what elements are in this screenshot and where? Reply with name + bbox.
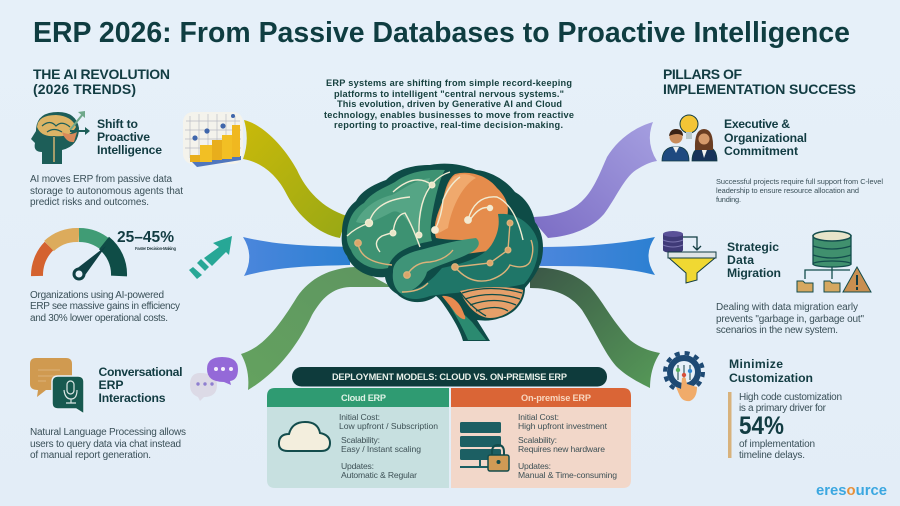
cloud ERP facts: Scalability: (341, 435, 380, 445)
subheading: strategic data migration: Data (727, 253, 754, 267)
brain: orange highlight (437, 174, 476, 234)
brain outline (342, 164, 543, 341)
on-premise ERP facts: Manual & Time-consuming (518, 470, 617, 480)
text: AI moves ERP (30, 174, 183, 208)
intro text block: ERP systems are shifting from simple record-keeping (326, 78, 572, 88)
callout: 54 percent: High code customization (739, 392, 842, 403)
ribbon: right blue (540, 237, 655, 275)
ribbon: dark green (530, 268, 660, 388)
subheading: strategic data migration (727, 240, 781, 280)
ribbon: yellow (243, 120, 347, 238)
on-premise ERP facts: High upfront investment (518, 421, 608, 431)
cloud ERP facts: Updates: (341, 461, 374, 471)
column: cloud ERP: Cloud ERP (341, 393, 386, 403)
on-premise ERP facts (518, 412, 617, 480)
text: data migration (716, 302, 864, 336)
stat: 54%: 54% (739, 412, 784, 440)
subheading: shift to proactive intelligence: Proactive (97, 130, 150, 144)
ribbon: purple (530, 122, 657, 238)
subheading: executive commitment: Organizational (724, 131, 807, 145)
text: data migration: prevents "garbage in, garbage out" (716, 314, 864, 325)
intro text block: platforms to intelligent "central nervous systems." (334, 89, 564, 99)
on-premise ERP facts: Scalability: (518, 435, 557, 445)
cloud ERP facts: Low upfront / Subscription (339, 421, 438, 431)
intro text block: This evolution, driven by Generative AI and Cloud (337, 99, 562, 109)
panel: pillars of implementation success (662, 66, 887, 499)
intro text block: technology, enables businesses to move from reactive (324, 110, 574, 120)
intro text block: reporting to proactive, real-time decision-making. (334, 120, 563, 130)
icon: head with brain (31, 111, 90, 164)
text: natural language: of manual report generation. (30, 450, 151, 461)
ribbon: left blue (243, 237, 350, 276)
subheading: executive commitment (724, 117, 807, 158)
column: on-premise ERP: On-premise ERP (521, 393, 591, 403)
column: on-premise ERP (451, 388, 631, 488)
brain: frontal lobe (347, 170, 445, 269)
right heading (663, 66, 856, 97)
icon: gear with sliders and hand (665, 353, 703, 401)
left heading: (2026 TRENDS) (33, 81, 136, 97)
text: natural language (30, 427, 186, 461)
text: successful projects (716, 177, 883, 204)
callout: 54 percent: is a primary driver for (739, 403, 827, 414)
icon: cloud (279, 422, 330, 451)
text: AI moves ERP: storage to autonomous agents that (30, 186, 183, 197)
stat: 25-45%: 25–45% (117, 229, 174, 246)
subheading: minimize customization: Minimize (729, 357, 783, 371)
flow ribbons (241, 120, 660, 390)
subheading: conversational ERP (98, 365, 182, 405)
text: natural language: users to query data via chat instead (30, 439, 181, 450)
icon: purple and grey chat bubbles (190, 357, 238, 401)
left heading: THE AI REVOLUTION (33, 66, 170, 82)
column: cloud ERP (267, 388, 449, 488)
gauge arc tan (49, 235, 79, 246)
subheading: executive commitment: Executive & (724, 117, 790, 131)
brain: lighter folds (356, 178, 430, 238)
subheading: shift to proactive intelligence (97, 117, 162, 157)
chart: gauge (37, 235, 119, 279)
subheading: conversational ERP: Interactions (98, 391, 166, 405)
icon: teal arrow (189, 236, 232, 279)
stem teal (450, 306, 486, 340)
logo: eresource: eresource (816, 483, 887, 499)
intro text block (324, 78, 574, 130)
subheading: conversational ERP: ERP (98, 378, 124, 392)
central brain illustration (342, 164, 543, 341)
text: organizations: ERP see massive gains in efficiency (30, 301, 180, 312)
text: successful projects: funding. (716, 195, 741, 204)
brain: cream circuit lines (347, 172, 523, 252)
icon: database into funnel (663, 231, 716, 283)
icon: voice chat bubbles (30, 358, 84, 414)
left heading (33, 66, 170, 97)
subheading: shift to proactive intelligence: Intelligence (97, 143, 162, 157)
subheading: executive commitment: Commitment (724, 144, 798, 158)
text: AI moves ERP: predict risks and outcomes. (30, 197, 149, 208)
right heading: IMPLEMENTATION SUCCESS (663, 81, 856, 97)
text: organizations: and 30% lower operational costs. (30, 313, 168, 324)
cloud ERP facts: Automatic & Regular (341, 470, 417, 480)
brain: stem (442, 296, 486, 340)
text: natural language: Natural Language Processing allows (30, 427, 186, 438)
text: successful projects: leadership to ensure resource allocation and (716, 186, 859, 195)
text: data migration: scenarios in the new system. (716, 325, 838, 336)
text: organizations: Organizations using AI-powered (30, 290, 164, 301)
deployment heading pill: DEPLOYMENT MODELS: CLOUD VS. ON-PREMISE ERP (332, 372, 567, 382)
text: successful projects: Successful projects require full support from C-level (716, 177, 883, 186)
text: organizations (30, 290, 180, 324)
brain: tan circuit lines (355, 220, 533, 292)
text: data migration: Dealing with data migration early (716, 302, 858, 313)
icon: database folders warning (797, 231, 871, 292)
on-premise ERP facts: Requires new hardware (518, 444, 605, 454)
subheading: strategic data migration: Strategic (727, 240, 779, 254)
subheading: conversational ERP: Conversational (98, 365, 182, 379)
ribbon: left green (241, 267, 392, 390)
cloud ERP facts: Easy / Instant scaling (341, 444, 421, 454)
brain: temporal lobe (393, 238, 479, 293)
title: ERP 2026: From Passive Databases to Proactive Intelligence (33, 17, 850, 49)
subheading: minimize customization: Customization (729, 371, 813, 385)
subheading: minimize customization (729, 357, 813, 385)
callout: 54 percent (728, 392, 842, 461)
cloud ERP facts (339, 412, 438, 480)
panel: deployment models (267, 367, 631, 488)
gauge needle (75, 246, 106, 278)
brain: orange lobe (435, 173, 508, 255)
on-premise ERP facts: Initial Cost: (518, 412, 559, 422)
gauge pivot (74, 269, 84, 279)
cloud ERP facts: Initial Cost: (339, 412, 380, 422)
brain: cerebellum (460, 287, 523, 318)
text: AI moves ERP: AI moves ERP from passive data (30, 174, 172, 185)
subheading: shift to proactive intelligence: Shift to (97, 117, 138, 131)
callout: 54 percent: timeline delays. (739, 450, 805, 461)
panel: AI revolution (30, 66, 243, 461)
deployment heading pill (292, 367, 607, 386)
brain: right teal region (400, 214, 538, 299)
cerebellum body (460, 287, 523, 318)
gauge arc orange (37, 246, 49, 276)
icon: rising bar chart (183, 112, 243, 167)
on-premise ERP facts: Updates: (518, 461, 551, 471)
subheading: strategic data migration: Migration (727, 266, 781, 280)
right heading: PILLARS OF (663, 66, 742, 82)
gauge arc green (79, 235, 106, 245)
icon: executives and light bulb (662, 115, 717, 161)
stat caption: Faster Decision-Making (135, 246, 176, 251)
stem orange (442, 296, 465, 319)
cerebellum folds (460, 288, 522, 316)
gauge arc dark (104, 243, 119, 276)
icon: server with lock (460, 422, 509, 471)
callout: 54 percent: of implementation (739, 439, 815, 450)
